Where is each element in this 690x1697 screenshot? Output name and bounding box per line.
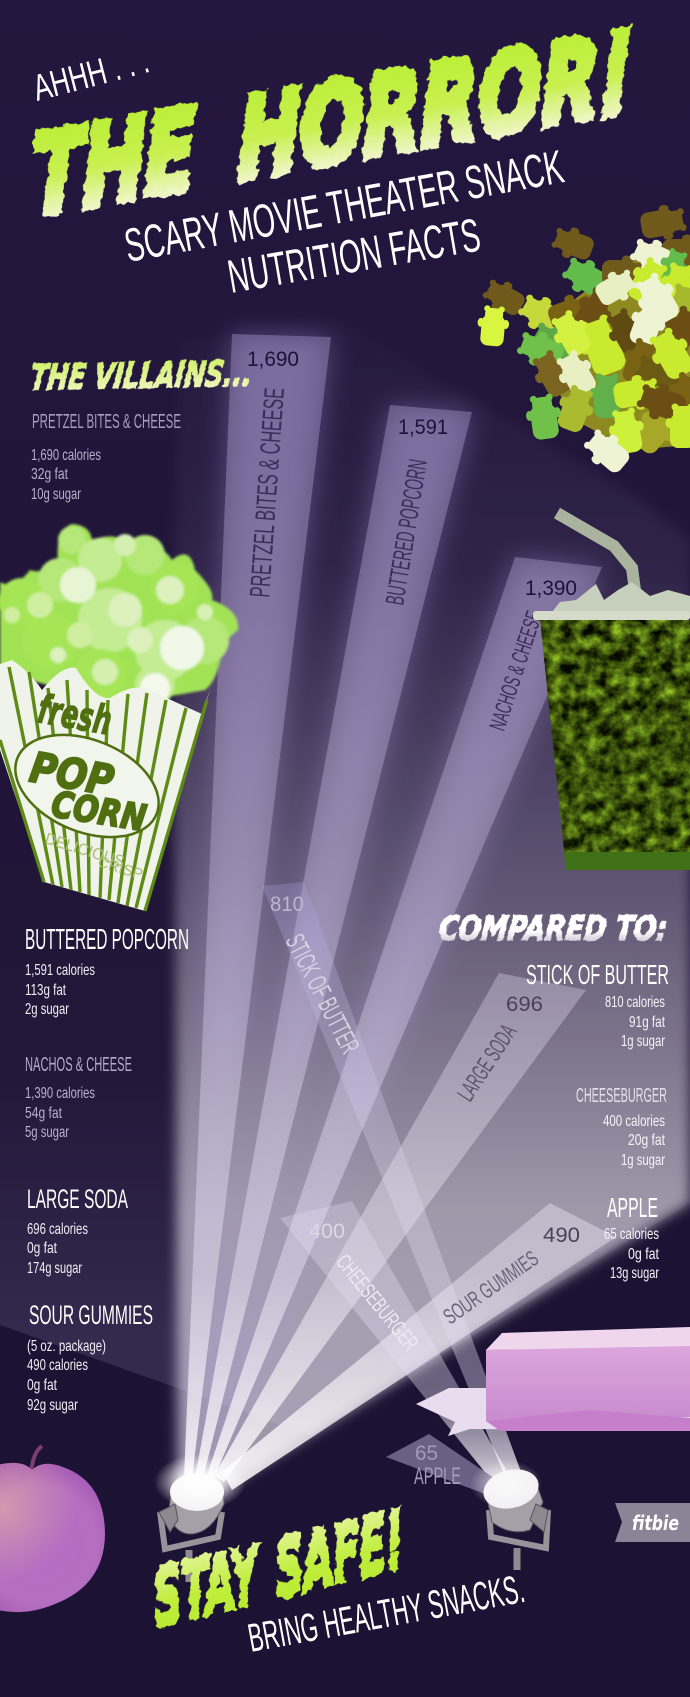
beam: large soda bbox=[214, 973, 586, 1482]
value: 65: 65 bbox=[415, 1442, 438, 1465]
stats: large soda: LARGE SODA bbox=[27, 1184, 128, 1214]
stats: stick of butter: 1g sugar bbox=[621, 1033, 665, 1050]
cup body bbox=[540, 620, 690, 868]
label: cheeseburger: CHEESEBURGER bbox=[331, 1249, 424, 1355]
fresh text: fresh bbox=[34, 687, 115, 745]
stats: sour gummies: 0g fat bbox=[27, 1377, 57, 1394]
subtitle line 2: NUTRITION FACTS bbox=[224, 208, 484, 303]
stats: stick of butter: 91g fat bbox=[629, 1014, 665, 1031]
stats: stick of butter: 810 calories bbox=[605, 994, 665, 1011]
logo: fitbie ribbon bbox=[615, 1503, 690, 1542]
cup base bbox=[564, 852, 690, 870]
heading: stay safe: STAY SAFE! bbox=[151, 1493, 406, 1646]
beam labels bbox=[244, 348, 580, 1490]
stats: pretzel bites & cheese: 32g fat bbox=[31, 466, 68, 483]
stats: nachos & cheese: NACHOS & CHEESE bbox=[25, 1054, 132, 1076]
left spotlight bbox=[154, 1454, 246, 1582]
lamp body bbox=[487, 1480, 543, 1532]
stats: nachos & cheese: 1,390 calories bbox=[25, 1085, 95, 1102]
stats: sour gummies bbox=[27, 1300, 153, 1414]
butter front bbox=[486, 1346, 690, 1421]
bar chart: spotlight beams bbox=[184, 334, 616, 1498]
lamp face bbox=[170, 1473, 224, 1511]
heading: the villains: THE VILLAINS... bbox=[28, 353, 255, 399]
popcorn ellipse badge bbox=[0, 715, 174, 857]
stats: cheeseburger: 1g sugar bbox=[621, 1152, 665, 1169]
value: 490: 490 bbox=[543, 1224, 580, 1247]
yoke bracket bbox=[530, 1504, 548, 1532]
stand bbox=[186, 1550, 192, 1582]
stats: cheeseburger: 20g fat bbox=[628, 1132, 665, 1149]
stats: large soda bbox=[27, 1184, 128, 1277]
stats: large soda: 696 calories bbox=[27, 1221, 88, 1238]
stats: cheeseburger: 400 calories bbox=[603, 1113, 665, 1130]
stats: pretzel bites & cheese bbox=[31, 411, 181, 503]
value: 400: 400 bbox=[309, 1220, 345, 1243]
straw bbox=[557, 513, 636, 598]
lamp face bbox=[479, 1464, 543, 1514]
value: 696: 696 bbox=[506, 993, 543, 1016]
stats: pretzel bites & cheese: 1,690 calories bbox=[31, 447, 101, 464]
popcorn kernels bbox=[0, 524, 238, 705]
box bbox=[0, 660, 211, 911]
box stripes bbox=[0, 667, 207, 911]
label: apple: APPLE bbox=[414, 1463, 461, 1490]
beam: apple bbox=[386, 1434, 503, 1498]
stats: apple: 65 calories bbox=[604, 1226, 659, 1243]
value: 810: 810 bbox=[270, 893, 304, 916]
icon: popcorn box bbox=[0, 524, 238, 911]
stats: large soda: 0g fat bbox=[27, 1240, 57, 1257]
stats: pretzel bites & cheese: PRETZEL BITES & CHEESE bbox=[32, 411, 181, 433]
value: 1,690: 1,690 bbox=[247, 348, 299, 371]
icon: butter stick bbox=[416, 1327, 690, 1436]
beam: pretzel bites bbox=[184, 334, 331, 1478]
stem bbox=[31, 1446, 42, 1473]
lamp body bbox=[168, 1490, 224, 1534]
wrapper bbox=[416, 1388, 690, 1436]
delicious text: DELICIOUS bbox=[43, 831, 126, 871]
stats: apple: 0g fat bbox=[628, 1246, 659, 1263]
label: nachos & cheese: NACHOS & CHEESE bbox=[484, 608, 547, 734]
kicker: ahhh: AHHH . . . bbox=[29, 40, 153, 109]
stats: nachos & cheese: 54g fat bbox=[25, 1105, 62, 1122]
stats: buttered popcorn: BUTTERED POPCORN bbox=[25, 924, 189, 956]
label: sour gummies: SOUR GUMMIES bbox=[439, 1246, 543, 1329]
lamp glow bbox=[470, 1460, 542, 1508]
light cone glow bbox=[174, 320, 690, 1500]
stats: buttered popcorn bbox=[25, 924, 189, 1018]
closing message bbox=[151, 1493, 528, 1661]
yoke bracket bbox=[159, 1504, 178, 1532]
stats: sour gummies: (5 oz. package) bbox=[27, 1338, 106, 1355]
label: large soda: LARGE SODA bbox=[452, 1020, 522, 1106]
icon: apple bbox=[0, 1446, 105, 1612]
panel: the villains bbox=[25, 353, 255, 1414]
panel: compared to bbox=[437, 909, 669, 1282]
wrapper under bbox=[486, 1410, 690, 1431]
label: stick of butter: STICK OF BUTTER bbox=[280, 929, 365, 1059]
stats: cheeseburger bbox=[576, 1085, 667, 1169]
cup rim bbox=[533, 611, 690, 620]
stats: apple: 13g sugar bbox=[610, 1265, 659, 1282]
stats: sour gummies: SOUR GUMMIES bbox=[29, 1300, 153, 1330]
value: 1,390: 1,390 bbox=[525, 577, 577, 600]
pop text: POP bbox=[26, 743, 118, 805]
stats: buttered popcorn: 113g fat bbox=[25, 982, 66, 999]
stats: large soda: 174g sugar bbox=[27, 1260, 82, 1277]
icon: soda cup bbox=[533, 513, 690, 870]
icon: gummy bears bbox=[476, 202, 690, 479]
stats: nachos & cheese bbox=[25, 1054, 132, 1141]
stats: sour gummies: 490 calories bbox=[27, 1357, 88, 1374]
label: buttered popcorn: BUTTERED POPCORN bbox=[379, 457, 433, 607]
heading block bbox=[29, 7, 633, 303]
stand bbox=[514, 1548, 520, 1570]
yoke bbox=[160, 1512, 222, 1549]
stats: nachos & cheese: 5g sugar bbox=[25, 1124, 69, 1141]
stats: stick of butter bbox=[526, 959, 669, 1050]
beam: sour gummies bbox=[222, 1203, 616, 1490]
beam: cheeseburger bbox=[280, 1201, 512, 1486]
label: pretzel bites & cheese: PRETZEL BITES & CHEESE bbox=[244, 387, 290, 598]
stats: apple bbox=[604, 1192, 659, 1282]
stats: sour gummies: 92g sugar bbox=[27, 1397, 78, 1414]
beam: buttered popcorn bbox=[195, 405, 472, 1478]
ice bbox=[552, 582, 690, 618]
stats: buttered popcorn: 2g sugar bbox=[25, 1001, 69, 1018]
crisp text: CRISP bbox=[96, 854, 145, 883]
beam: nachos bbox=[206, 557, 602, 1478]
corn text: CORN bbox=[49, 784, 149, 840]
butter top bbox=[486, 1327, 690, 1350]
right spotlight bbox=[470, 1460, 548, 1570]
yoke bbox=[489, 1510, 548, 1548]
value: 1,591: 1,591 bbox=[398, 416, 448, 439]
beam: stick of butter bbox=[262, 882, 524, 1484]
beam glow halos bbox=[184, 334, 602, 1478]
stats: buttered popcorn: 1,591 calories bbox=[25, 962, 95, 979]
stats: pretzel bites & cheese: 10g sugar bbox=[31, 486, 81, 503]
lamp glow bbox=[154, 1454, 246, 1510]
